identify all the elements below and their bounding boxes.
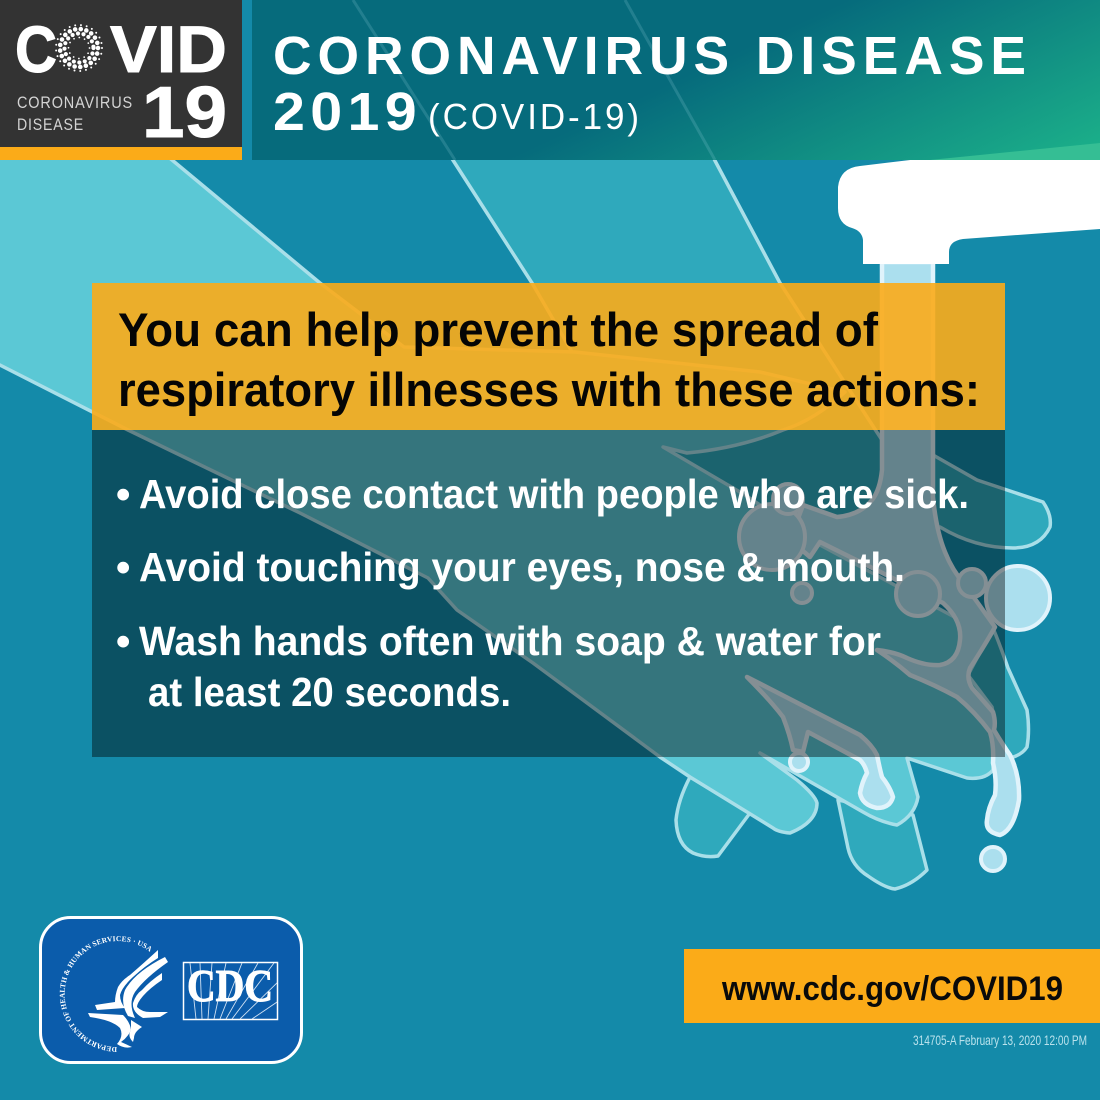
header year: 2019 (273, 82, 422, 142)
lower right finger (968, 628, 1028, 758)
website address: www.cdc.gov/COVID19 (721, 970, 1063, 1008)
logo letters VID: VID (110, 12, 227, 86)
front arm and hand (0, 140, 995, 833)
soap bubbles (739, 484, 1050, 871)
HHS and CDC logo badge (39, 916, 303, 1064)
action three line one: Wash hands often with soap & water for (139, 618, 881, 664)
logo number 19: 19 (142, 73, 227, 153)
bullet one: • (116, 471, 130, 517)
logo subtitle line one: CORONAVIRUS (17, 93, 133, 112)
CDC logo: CDC (187, 961, 273, 1011)
water stream from faucet (790, 262, 1019, 835)
header acronym: (COVID-19) (428, 96, 642, 137)
heading line two: respiratory illnesses with these actions: (118, 363, 980, 416)
virus dots icon (56, 25, 102, 71)
action three line two: at least 20 seconds. (148, 669, 511, 715)
orange heading panel (92, 283, 1005, 430)
heading line one: You can help prevent the spread of (118, 303, 878, 356)
illustration: hands under running water (0, 140, 1050, 889)
dark actions panel (92, 430, 1005, 757)
header banner (252, 0, 1100, 160)
action two: Avoid touching your eyes, nose & mouth. (139, 544, 905, 590)
HHS seal text: DEPARTMENT OF HEALTH & HUMAN SERVICES · USA (60, 936, 151, 1052)
lower middle finger (838, 800, 927, 889)
COVID-19 logo block (0, 0, 242, 160)
HHS eagle icon (88, 950, 168, 1048)
lower left finger (676, 777, 750, 857)
faucet (838, 155, 1100, 264)
logo letter C: C (15, 12, 57, 86)
action one: Avoid close contact with people who are sick. (139, 471, 969, 517)
bullet two: • (116, 544, 130, 590)
header title: CORONAVIRUS DISEASE (273, 26, 1032, 86)
bullet three: • (116, 618, 130, 664)
logo subtitle line two: DISEASE (17, 115, 84, 134)
back arm and upper right finger (440, 140, 1050, 548)
water running over fingers (747, 677, 893, 808)
website banner (684, 949, 1100, 1023)
